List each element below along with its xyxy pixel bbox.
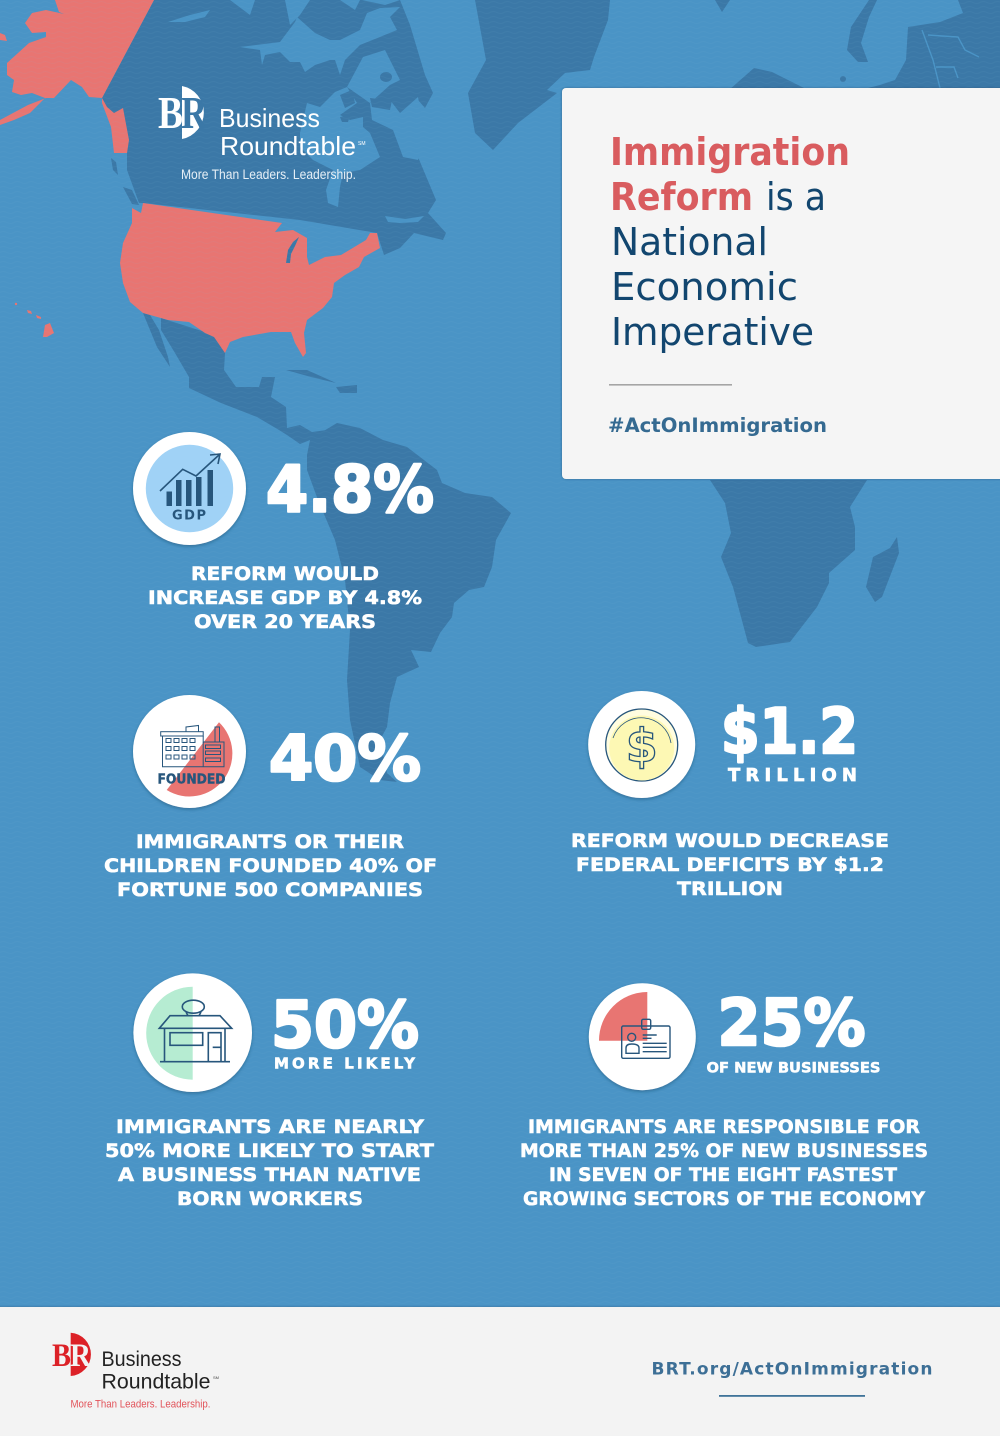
number: 4.8% [266,454,434,528]
map: Canadian waters [168,0,425,223]
description: TRILLION [677,879,783,900]
logo: Business Roundtable red: More Than Leaders. Leadership. [70,1399,210,1411]
title: Immigration [610,130,850,175]
title: is a [766,175,826,220]
logo: Business Roundtable red: Roundtable [102,1370,210,1393]
website url: BRT.org/ActOnImmigration [652,1359,932,1379]
unit: TRILLION [728,765,857,786]
title [610,130,850,355]
description: IN SEVEN OF THE EIGHT FASTEST [549,1165,897,1186]
description [520,1117,928,1210]
description: A BUSINESS THAN NATIVE [118,1165,421,1186]
logo: Business Roundtable red: B [52,1338,71,1374]
stat: $1.2 trillion [571,691,889,900]
panel: footer [0,1307,1000,1436]
hashtag: #ActOnImmigration [608,414,827,437]
world map [0,0,1000,782]
logo: Business Roundtable red: R [70,1338,92,1374]
stat: GDP 4.8% [133,432,434,633]
title: National [611,220,768,265]
icon: storefront [133,973,252,1092]
stat: 40% founded [104,695,437,901]
icon: GDP chart [133,432,246,545]
number: 25% [718,987,866,1061]
description: IMMIGRANTS OR THEIR [136,832,404,853]
map: Alaska highlighted [0,0,154,153]
map: South America [307,423,511,782]
description: GROWING SECTORS OF THE ECONOMY [523,1189,926,1210]
description: BORN WORKERS [177,1189,363,1210]
map: Africa [710,480,867,647]
logo: Business Roundtable red: SM [213,1375,219,1380]
description: REFORM WOULD [191,564,379,585]
map: Hawaii [15,303,54,337]
description [105,1117,434,1210]
logo: Business Roundtable white: Roundtable [220,131,356,161]
map: North America landmass [102,0,446,444]
map: continental United States highlighted [120,203,380,357]
logo: Business Roundtable white: R [181,88,207,138]
description: INCREASE GDP BY 4.8% [148,588,422,609]
map: Europe and Asia [715,0,1000,90]
description: 50% MORE LIKELY TO START [105,1141,434,1162]
map: Hudson region islands [340,72,392,122]
icon: GDP chart: GDP [172,508,206,524]
icon: ID badge [589,983,696,1090]
description: IMMIGRANTS ARE NEARLY [116,1117,425,1138]
logo: Business Roundtable red: Business [102,1348,182,1371]
unit: OF NEW BUSINESSES [706,1061,880,1077]
icon: dollar coin: $ [626,719,658,773]
logo: Business Roundtable white: More Than Leaders. Leadership. [181,167,356,182]
title: Reform [610,175,753,220]
number: 40% [269,722,421,795]
description: MORE THAN 25% OF NEW BUSINESSES [520,1141,928,1162]
icon: founded buildings [133,695,246,808]
title: Economic [611,265,798,310]
description [104,832,437,901]
description: OVER 20 YEARS [194,612,376,633]
title: Imperative [611,310,814,355]
number: $1.2 [721,695,858,768]
panel: title card [562,88,1000,479]
description: FORTUNE 500 COMPANIES [117,880,423,901]
description [571,831,889,900]
logo: Business Roundtable white [158,86,366,182]
logo: Business Roundtable red [52,1333,219,1411]
map: Lake Michigan [286,237,299,263]
description [148,564,422,633]
icon: founded buildings: FOUNDED [158,772,226,788]
map: Aleutian island [0,33,7,41]
logo: Business Roundtable white: B [158,88,183,138]
map: Madagascar [866,537,899,602]
description: IMMIGRANTS ARE RESPONSIBLE FOR [528,1117,920,1138]
icon: dollar coin [588,691,695,798]
description: REFORM WOULD DECREASE [571,831,889,852]
logo: Business Roundtable white: Business [219,103,320,133]
logo: Business Roundtable white: SM [358,141,366,147]
unit: MORE LIKELY [274,1054,416,1072]
map: Asia rivers [922,30,979,88]
map: Greenland [468,0,610,150]
stat: 50% more likely [105,973,434,1210]
stat: 25% of new businesses [520,983,928,1210]
number: 50% [271,989,419,1063]
description: CHILDREN FOUNDED 40% OF [104,856,437,877]
description: FEDERAL DEFICITS BY $1.2 [576,855,884,876]
